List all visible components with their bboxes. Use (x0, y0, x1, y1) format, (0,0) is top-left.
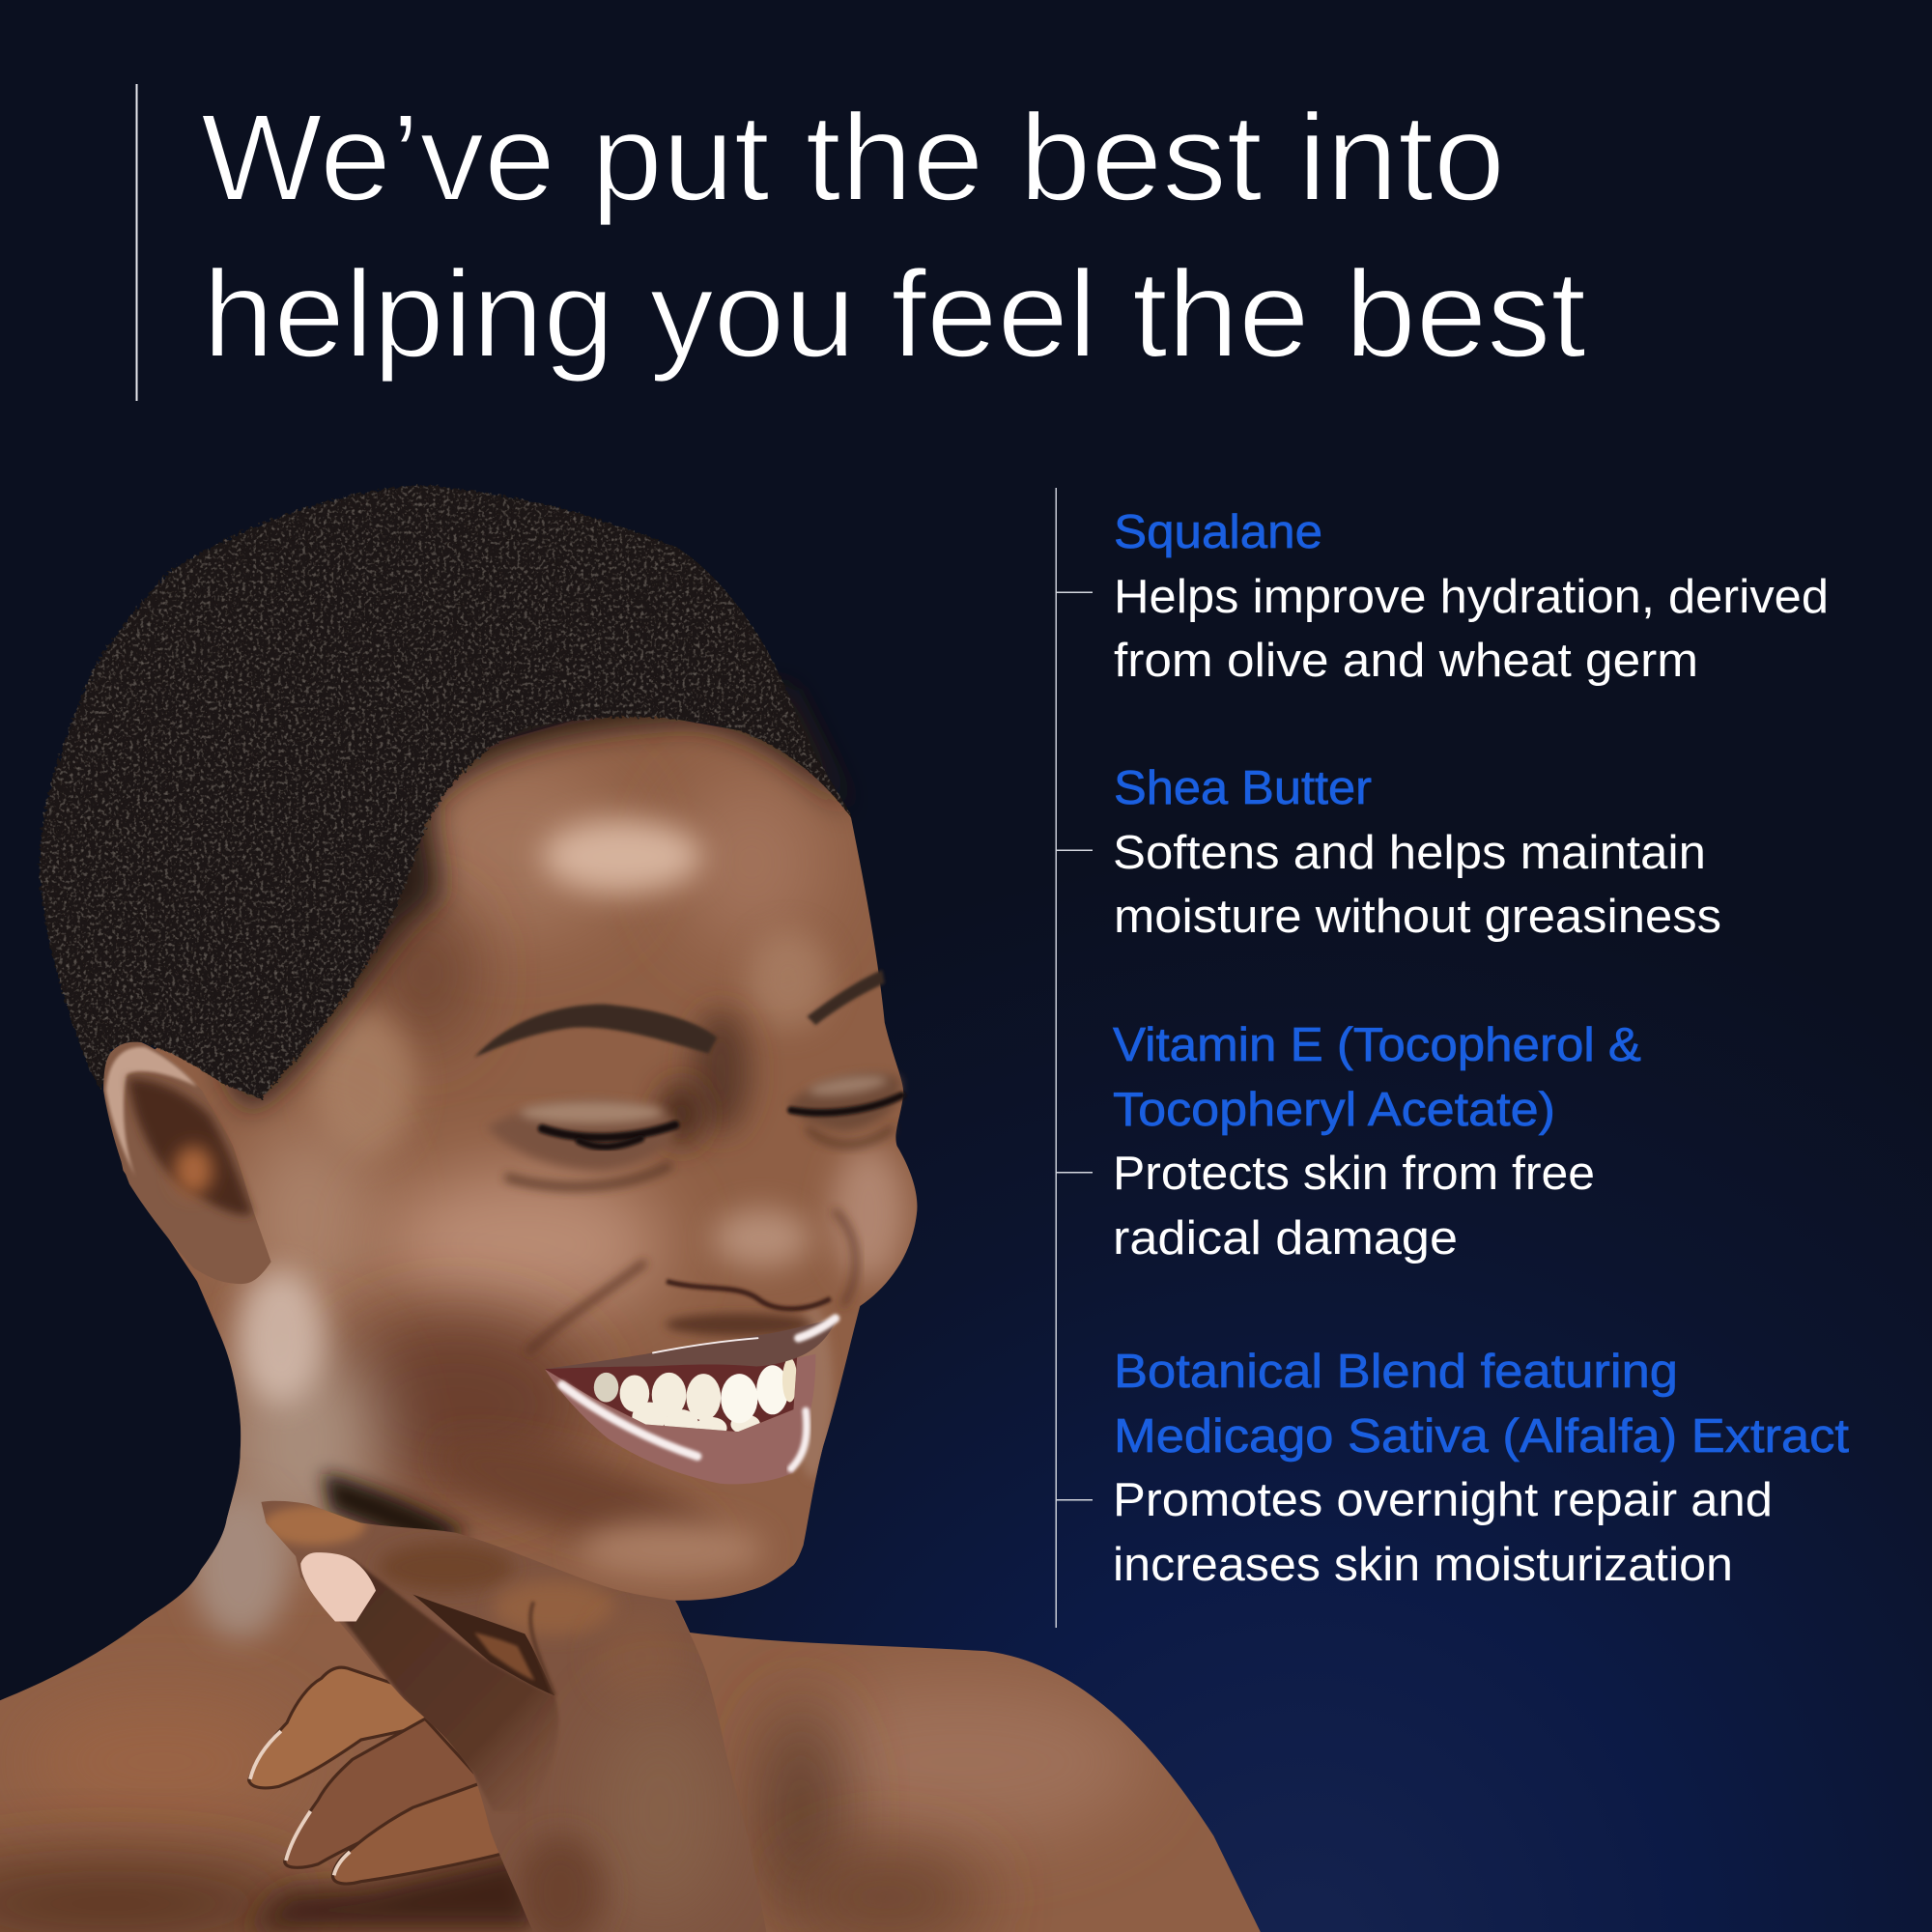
ingredient: shea butter (1056, 762, 1721, 943)
title heading: We’ve put the best into (201, 89, 1505, 227)
ear inner (128, 1078, 252, 1215)
right eye (788, 1071, 902, 1145)
left eye (487, 1082, 703, 1187)
hair (40, 486, 853, 1099)
gap between finger and thumb (412, 1594, 554, 1695)
ear rim highlight (106, 1047, 197, 1177)
ingredient: squalane: Helps improve hydration, derived (1114, 571, 1829, 623)
ingredient: vitamin e (1056, 1019, 1641, 1264)
ingredient: vitamin e: Vitamin E (Tocopherol & (1113, 1019, 1641, 1071)
title block (135, 84, 1586, 401)
vertical rule (1055, 488, 1057, 1628)
lip highlights (562, 1319, 836, 1468)
skin shading (0, 764, 1146, 1932)
eyebrows (474, 970, 885, 1057)
hand (246, 1491, 777, 1932)
ingredient: vitamin e: radical damage (1113, 1212, 1458, 1264)
hand shading (263, 1506, 727, 1932)
smile crease (527, 1262, 645, 1352)
lower lip (545, 1354, 815, 1484)
fingernail edges (250, 1731, 350, 1875)
photo: smiling woman (0, 486, 1269, 1932)
ingredient: shea butter: Softens and helps maintain (1113, 827, 1706, 879)
ingredient list (1055, 488, 1849, 1628)
thumb (344, 1559, 558, 1808)
ingredient: botanical blend: Medicago Sativa (Alfalfa) Extract (1114, 1410, 1849, 1463)
ingredient: botanical blend (1056, 1346, 1849, 1591)
mouth (545, 1318, 838, 1484)
ingredient: squalane: Squalane (1114, 506, 1322, 558)
upper lip (545, 1318, 838, 1369)
nose (666, 1208, 856, 1336)
title heading (201, 89, 1586, 384)
ear (103, 1042, 271, 1284)
title rule (135, 84, 137, 401)
ingredient: squalane: from olive and wheat germ (1114, 635, 1698, 687)
ingredient: squalane (1056, 506, 1829, 687)
ingredient: botanical blend: Promotes overnight repair and (1113, 1474, 1773, 1526)
thumb crease (530, 1602, 554, 1695)
teeth (593, 1359, 796, 1432)
ingredient: vitamin e: Tocopheryl Acetate) (1113, 1084, 1555, 1136)
ingredient: botanical blend: increases skin moisturization (1113, 1539, 1733, 1591)
ingredient: shea butter: moisture without greasiness (1114, 891, 1721, 943)
ingredient: vitamin e: Protects skin from free (1113, 1148, 1595, 1200)
hair fade at hairline (222, 690, 850, 1109)
skin base: head, neck, shoulders (0, 690, 1269, 1932)
lower fingers (249, 1667, 524, 1884)
title heading: helping you feel the best (203, 245, 1586, 384)
thumbnail (300, 1552, 376, 1622)
mouth interior (545, 1355, 797, 1432)
ingredient: botanical blend: Botanical Blend featuring (1114, 1346, 1678, 1398)
ingredient: shea butter: Shea Butter (1114, 762, 1372, 814)
